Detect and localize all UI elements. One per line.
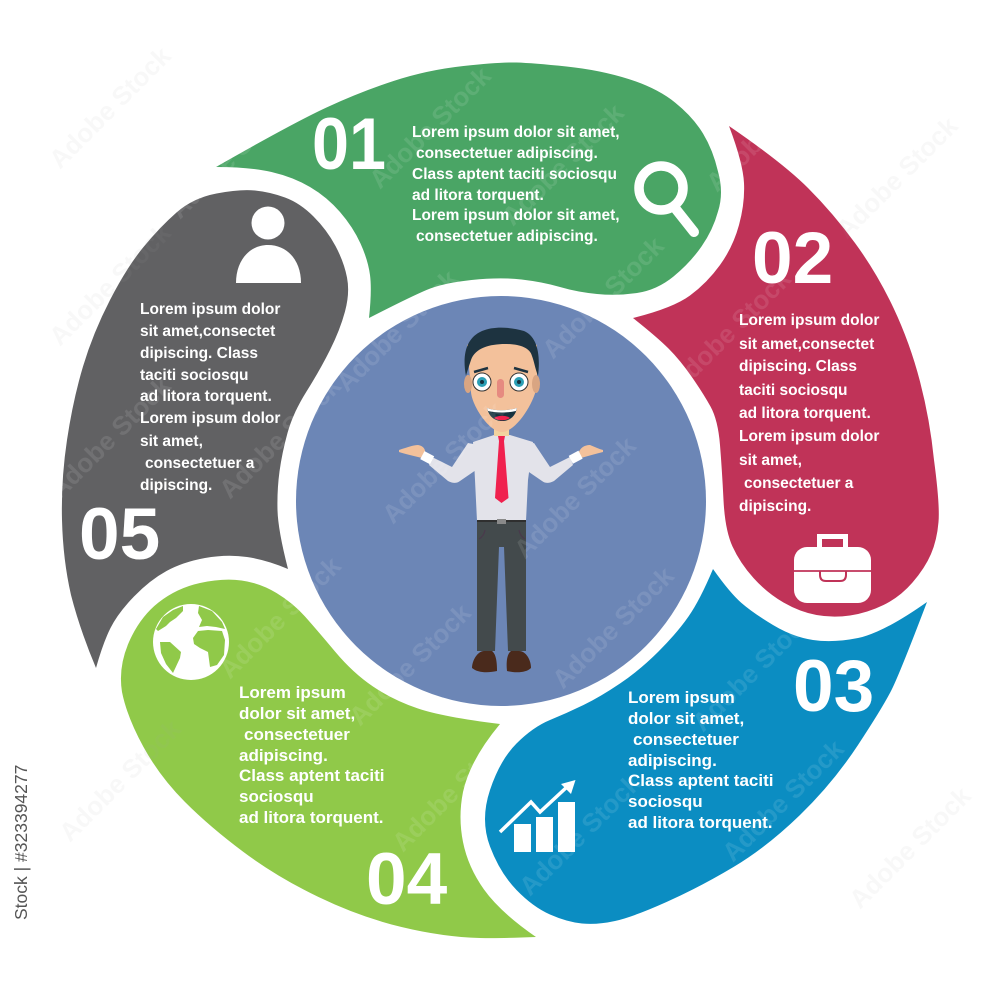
shoes [472, 651, 497, 672]
watermark: Adobe Stock [43, 370, 177, 504]
eyebrows [474, 368, 528, 372]
watermark: Adobe Stock [43, 217, 177, 351]
icon: magnifying glass [639, 166, 694, 232]
left sleeve [429, 443, 478, 483]
head [467, 340, 537, 432]
text block 02: sit amet,consectet [739, 336, 874, 353]
watermark: Adobe Stock [213, 370, 347, 504]
text block 01: Lorem ipsum dolor sit amet, [412, 124, 620, 141]
character: businessman [399, 328, 603, 672]
ears [464, 375, 472, 393]
text block 05: ad litora torquent. [140, 388, 272, 405]
text block 04: Lorem ipsum [239, 683, 346, 702]
left hand [399, 445, 425, 458]
center circle [296, 296, 706, 706]
number 04: 04 [366, 839, 448, 920]
text block 02: consectetuer a [744, 475, 854, 492]
text block 05: taciti sociosqu [140, 367, 249, 384]
text block 05: Lorem ipsum dolor [140, 301, 280, 318]
icon: person [236, 206, 301, 283]
stock id side text: Stock | #323394277 [11, 765, 31, 920]
text block 03: adipiscing. [628, 751, 717, 770]
watermark: Adobe Stock [663, 263, 797, 397]
watermark: Adobe Stock [496, 97, 630, 231]
text block 01: ad litora torquent. [412, 187, 544, 204]
watermark: Adobe Stock [163, 90, 297, 224]
watermark: Adobe Stock [700, 63, 834, 197]
watermark: Adobe Stock [43, 40, 177, 174]
text block 01: Class aptent taciti sociosqu [412, 166, 617, 183]
eyes [473, 373, 491, 391]
text block 03: consectetuer [633, 730, 739, 749]
watermark: Adobe Stock [508, 430, 642, 564]
mouth [487, 408, 517, 421]
text block 02: Lorem ipsum dolor [739, 312, 879, 329]
torso [473, 435, 533, 521]
text block 04: sociosqu [239, 787, 314, 806]
neck [494, 425, 509, 436]
watermark: Adobe Stock [716, 733, 850, 867]
text block 03: ad litora torquent. [628, 813, 772, 832]
text block 04: dolor sit amet, [239, 704, 355, 723]
text block 01: consectetuer adipiscing. [416, 228, 598, 245]
nose [497, 379, 504, 398]
text block 05: dipiscing. [140, 477, 212, 494]
text block 01: consectetuer adipiscing. [416, 145, 598, 162]
panel 02: crimson segment [633, 126, 939, 617]
text block 01: Lorem ipsum dolor sit amet, [412, 207, 620, 224]
text block 02: dipiscing. [739, 498, 811, 515]
text block 02: taciti sociosqu [739, 382, 848, 399]
panel 01: green segment [216, 62, 721, 318]
text block 03: dolor sit amet, [628, 709, 744, 728]
watermark: Adobe Stock [363, 60, 497, 194]
pockets [479, 530, 525, 539]
text block 05: dipiscing. Class [140, 345, 258, 362]
panel 03: blue segment [485, 569, 927, 924]
icon: briefcase [794, 536, 871, 603]
text block 04: adipiscing. [239, 746, 328, 765]
watermark: Adobe Stock [330, 263, 464, 397]
watermark: Adobe Stock [830, 110, 964, 244]
watermark: Adobe Stock [343, 597, 477, 731]
legs [477, 521, 526, 651]
watermark: Adobe Stock [376, 395, 510, 529]
text block 02: dipiscing. Class [739, 358, 857, 375]
watermark: Adobe Stock [536, 230, 670, 364]
number 03: 03 [793, 646, 874, 727]
icon: growth chart [500, 780, 576, 852]
hair [465, 328, 539, 376]
watermark: Adobe Stock [686, 603, 820, 737]
text block 02: Lorem ipsum dolor [739, 428, 879, 445]
watermark: Adobe Stock [546, 560, 680, 694]
icon: globe [153, 604, 229, 680]
text block 04: Class aptent taciti [239, 766, 384, 785]
text block 05: sit amet,consectet [140, 323, 275, 340]
text block 03: Lorem ipsum [628, 688, 735, 707]
watermark: Adobe Stock [213, 550, 347, 684]
text block 03: Class aptent taciti [628, 771, 774, 790]
text block 05: consectetuer a [145, 455, 255, 472]
text block 02: ad litora torquent. [739, 405, 871, 422]
number 01: 01 [312, 104, 386, 185]
panel 05: grey segment [62, 190, 348, 668]
watermark: Adobe Stock [513, 767, 647, 901]
text block 04: ad litora torquent. [239, 808, 384, 827]
right hand [578, 445, 603, 458]
watermark: Adobe Stock [53, 713, 187, 847]
belt [477, 520, 526, 522]
text block 05: sit amet, [140, 433, 203, 450]
right sleeve [524, 443, 573, 483]
text block 05: Lorem ipsum dolor [140, 410, 280, 427]
necktie [495, 436, 508, 503]
text block 03: sociosqu [628, 792, 703, 811]
text block 04: consectetuer [244, 725, 350, 744]
panel 04: light green segment [121, 580, 536, 938]
number 05: 05 [79, 494, 160, 575]
text block 02: sit amet, [739, 452, 802, 469]
watermark: Adobe Stock [386, 723, 520, 857]
number 02: 02 [752, 218, 833, 299]
watermark: Adobe Stock [843, 780, 977, 914]
cuffs [420, 451, 434, 464]
